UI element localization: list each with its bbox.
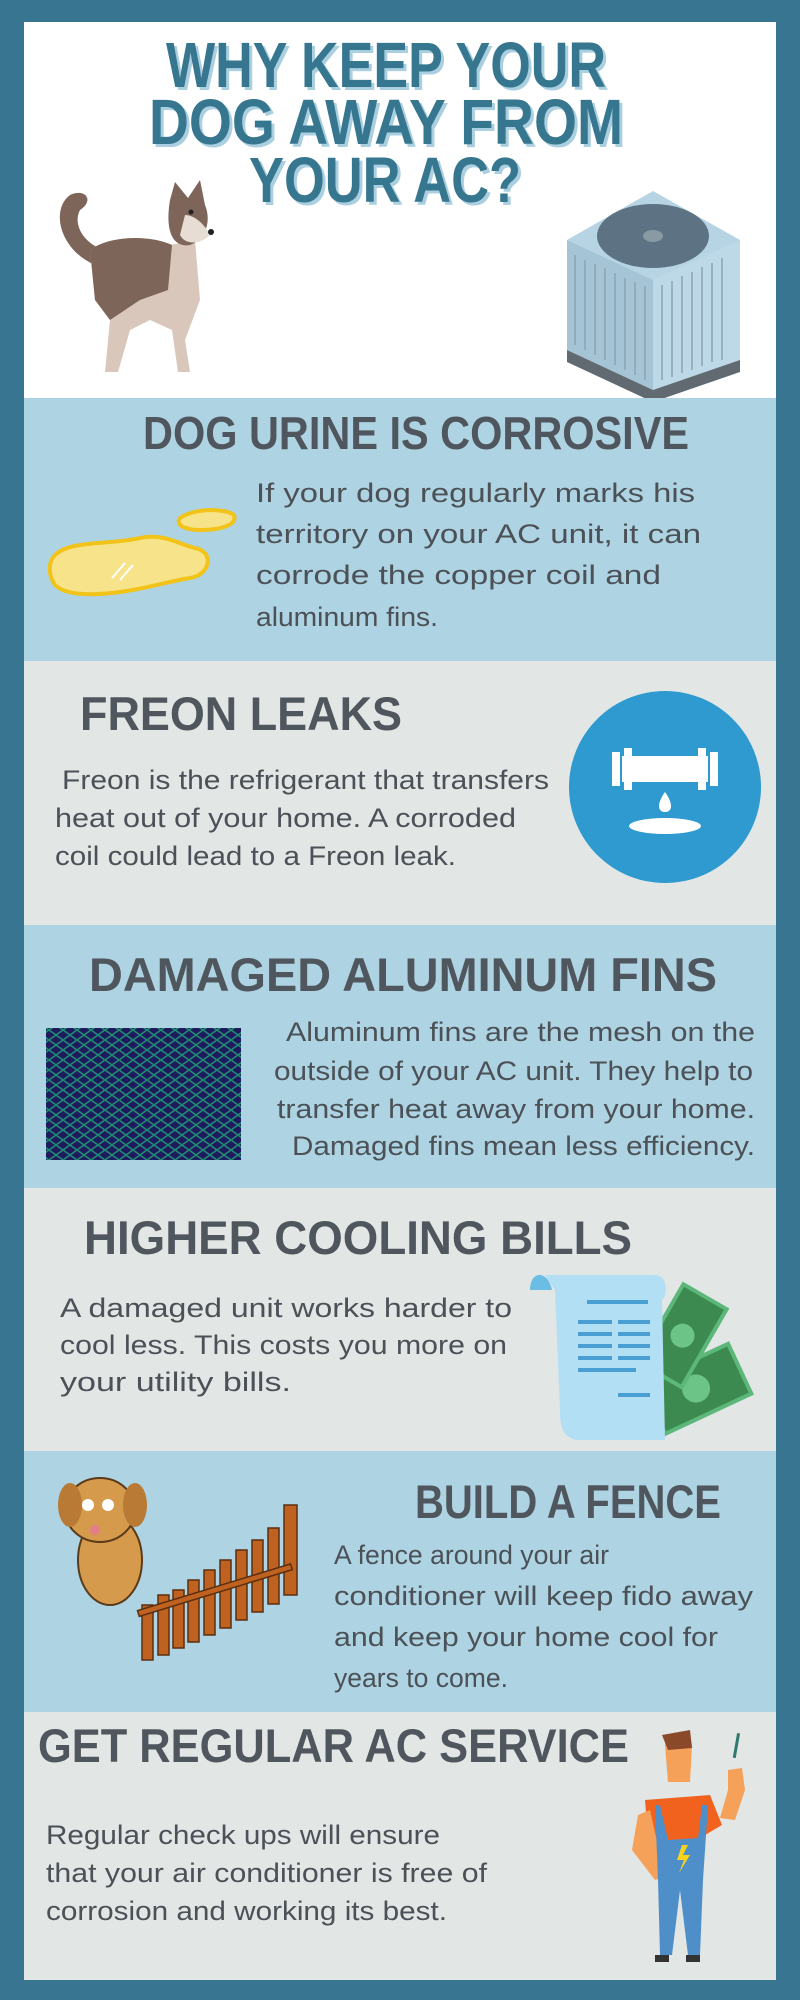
text block: Aluminum fins are the mesh on the [286, 1017, 755, 1047]
panel: header [24, 22, 776, 402]
heading: HIGHER COOLING BILLS [84, 1211, 632, 1264]
panel: freon leaks [24, 661, 776, 925]
text block: outside of your AC unit. They help to [274, 1056, 753, 1086]
text block: Regular check ups will ensure [46, 1820, 440, 1850]
title: DOG AWAY FROM [152, 89, 626, 161]
icon: puddle [50, 510, 235, 594]
text block: A fence around your air [334, 1540, 609, 1570]
icon: dog with fence [58, 1478, 297, 1660]
heading: FREON LEAKS [80, 687, 402, 740]
text block: corrode the copper coil and [256, 560, 661, 590]
panel: build a fence [24, 1451, 776, 1712]
text block [274, 1017, 755, 1161]
heading: GET REGULAR AC SERVICE [38, 1719, 629, 1772]
text block: coil could lead to a Freon leak. [55, 841, 456, 871]
text block: corrosion and working its best. [46, 1896, 447, 1926]
icon: mesh [46, 1028, 241, 1160]
text block [55, 765, 549, 871]
panel: higher cooling bills [24, 1188, 776, 1451]
text block [46, 1820, 488, 1926]
icon: leaking pipe [569, 691, 761, 883]
text block: territory on your AC unit, it can [256, 519, 701, 549]
text block: cool less. This costs you more on [60, 1330, 507, 1360]
text block: conditioner will keep fido away [334, 1581, 754, 1611]
title [149, 29, 626, 219]
text block: A damaged unit works harder to [60, 1293, 512, 1323]
text block: that your air conditioner is free of [46, 1858, 488, 1888]
text block [334, 1540, 754, 1693]
title: WHY KEEP YOUR [166, 29, 606, 101]
title: YOUR AC? [252, 147, 524, 219]
heading: DOG URINE IS CORROSIVE [143, 407, 689, 459]
text block: If your dog regularly marks his [256, 478, 695, 508]
text block: years to come. [334, 1663, 508, 1693]
panel: dog urine is corrosive [24, 398, 776, 661]
panel: get regular ac service [24, 1712, 776, 1980]
text block: and keep your home cool for [334, 1622, 718, 1652]
text block [256, 478, 701, 632]
text block: Freon is the refrigerant that transfers [62, 765, 549, 795]
text block: aluminum fins. [256, 602, 438, 632]
title: WHY KEEP YOUR [169, 32, 609, 104]
panel: damaged aluminum fins [24, 925, 776, 1188]
icon: dog [60, 180, 214, 372]
heading: BUILD A FENCE [415, 1475, 721, 1528]
text block: heat out of your home. A corroded [55, 803, 516, 833]
icon: repairman [632, 1730, 745, 1962]
icon: AC unit [567, 191, 740, 402]
text block: transfer heat away from your home. [277, 1094, 755, 1124]
icon: bill and money [530, 1275, 751, 1440]
text block [60, 1293, 512, 1397]
title: YOUR AC? [249, 144, 521, 216]
title: DOG AWAY FROM [149, 86, 623, 158]
text block: Damaged fins mean less efficiency. [292, 1131, 755, 1161]
heading: DAMAGED ALUMINUM FINS [89, 948, 717, 1001]
text block: your utility bills. [60, 1367, 291, 1397]
